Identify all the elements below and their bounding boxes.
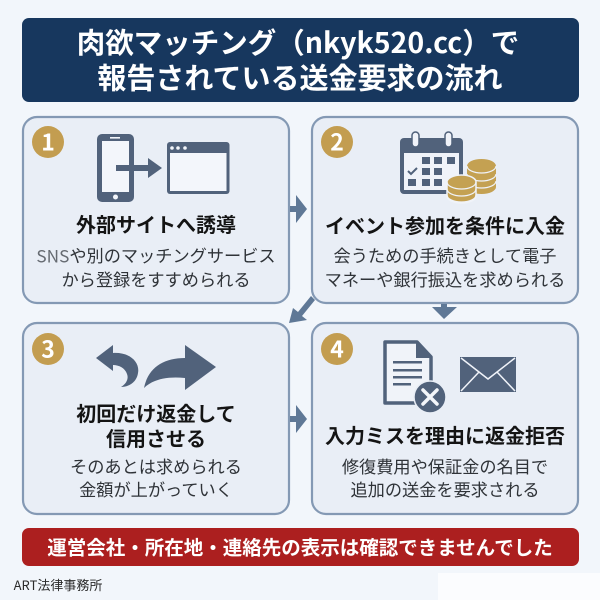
icon: rejected document xyxy=(385,342,446,413)
title banner: 肉欲マッチング（nkyk520.cc）で xyxy=(77,21,519,62)
step 1 heading: 外部サイトへ誘導 xyxy=(76,209,236,238)
step 4 heading: 入力ミスを理由に返金拒否 xyxy=(325,420,565,449)
step 3 heading: 信用させる xyxy=(106,423,206,452)
icon: phone to browser xyxy=(97,134,230,202)
badge 3 xyxy=(32,330,64,365)
panel: step 4 xyxy=(312,323,578,514)
arrow: step 1 to step 2 xyxy=(290,195,307,223)
warning banner xyxy=(22,528,579,566)
icon: small return arrow and large forward arrow xyxy=(96,345,216,390)
step 2 description: マネーや銀行振込を求められる xyxy=(325,266,565,291)
step 2 description xyxy=(325,242,565,291)
badge 1 xyxy=(32,124,64,158)
step 3 description: そのあとは求められる xyxy=(70,453,242,478)
badge 2: 2 xyxy=(330,124,344,158)
warning banner: 運営会社・所在地・連絡先の表示は確認できませんでした xyxy=(47,532,553,560)
arrow: step 2 to step 4 xyxy=(432,304,457,319)
badge 4 xyxy=(321,330,353,365)
icon: envelope xyxy=(460,357,516,392)
step 3 description: 金額が上がっていく xyxy=(79,476,233,501)
panel: step 2 xyxy=(312,117,578,303)
badge 1: 1 xyxy=(41,124,55,158)
step 1 description: から登録をすすめられる xyxy=(61,266,251,291)
white footer patch xyxy=(438,573,600,600)
badge 4: 4 xyxy=(330,330,344,364)
step 4 description xyxy=(342,453,548,501)
icon: calendar and coins xyxy=(400,132,496,203)
step 4 description: 追加の送金を要求される xyxy=(350,476,540,501)
arrow: step 3 to step 4 xyxy=(290,405,307,433)
panel: step 1 xyxy=(23,117,289,303)
badge 3: 3 xyxy=(41,330,55,364)
step 2 heading: イベント参加を条件に入金 xyxy=(325,210,565,239)
title banner xyxy=(22,18,579,102)
title banner: 報告されている送金要求の流れ xyxy=(97,56,503,98)
step 2 description: 会うための手続きとして電子 xyxy=(334,242,556,267)
arrow: step 2 to step 3 xyxy=(289,296,315,323)
badge 2 xyxy=(321,124,353,158)
footer credit: ART法律事務所 xyxy=(14,575,102,594)
step 4 description: 修復費用や保証金の名目で xyxy=(342,453,548,478)
step 1 description xyxy=(36,242,276,291)
step 3 description xyxy=(70,453,242,501)
step 3 heading: 初回だけ返金して xyxy=(76,398,236,427)
step 3 heading xyxy=(76,398,236,452)
step 1 description: SNSや別のマッチングサービス xyxy=(36,242,276,267)
panel: step 3 xyxy=(23,323,289,514)
